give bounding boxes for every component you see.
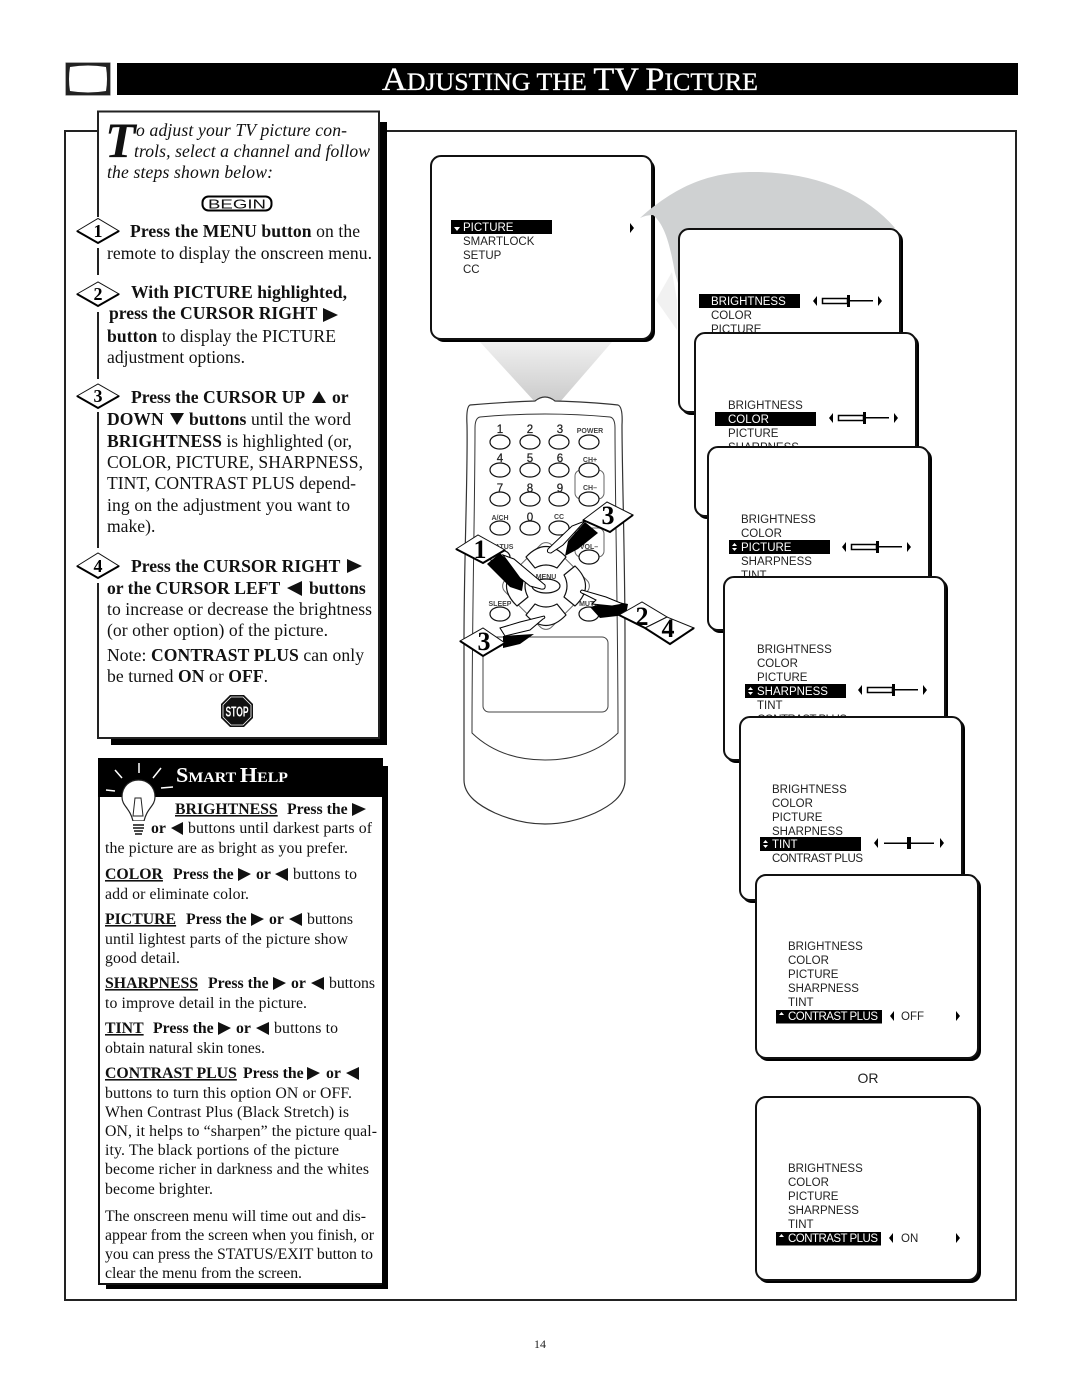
smart help tips: SHARPNESS xyxy=(105,975,198,992)
hand pointing at menu, tag 1 xyxy=(456,535,545,591)
hand pointing up, tag 3: 3 xyxy=(602,501,614,530)
step 4: 4 xyxy=(94,556,102,576)
smart help tips xyxy=(105,801,377,1282)
step 3: 3 xyxy=(94,386,102,406)
smart help tips: or xyxy=(291,975,306,992)
smart help tips: buttons to turn this option ON or OFF. xyxy=(105,1085,352,1102)
smart help tips: Press the xyxy=(208,975,269,992)
screen: sharpness: CONTRAST PLUS xyxy=(757,714,847,726)
intro text: the steps shown below: xyxy=(107,162,273,182)
screen: picture: COLOR xyxy=(741,528,782,540)
button labels: CH– xyxy=(583,485,597,492)
screen: contrast plus on: PICTURE xyxy=(788,1191,839,1203)
hand pointing right pad, tags 2 and 4: 2 xyxy=(636,602,648,631)
hand pointing down pad, tag 3: 3 xyxy=(478,627,490,656)
smart help tips: the picture are as bright as you prefer. xyxy=(105,840,348,857)
smart help tips: or xyxy=(326,1065,341,1082)
screen: tint: CONTRAST PLUS xyxy=(772,853,863,865)
smart help tips: BRIGHTNESS xyxy=(175,801,278,818)
step 1: Press the MENU button on the xyxy=(130,221,360,241)
step 3: DOWN xyxy=(107,409,164,429)
screen: contrast plus off: OFF xyxy=(901,1011,924,1023)
step 2: button to display the PICTURE xyxy=(107,326,336,346)
button labels: SLEEP xyxy=(489,601,512,608)
screen: tint: PICTURE xyxy=(772,812,823,824)
gray swoosh arrow between screens xyxy=(640,172,895,330)
step 4 xyxy=(77,553,372,686)
screen: contrast plus off: TINT xyxy=(788,997,814,1009)
smart help tips: COLOR xyxy=(105,866,164,883)
button labels: 1 xyxy=(497,424,503,436)
screen: sharpness: SHARPNESS xyxy=(757,686,828,698)
smart help tips: Press the xyxy=(243,1065,304,1082)
channel and volume brackets xyxy=(575,470,604,557)
screen: contrast plus off: BRIGHTNESS xyxy=(788,941,863,953)
screen: color: COLOR xyxy=(728,414,769,426)
button labels: 2 xyxy=(527,424,533,436)
screen: contrast plus off: SHARPNESS xyxy=(788,983,859,995)
screen: sharpness: TINT xyxy=(757,700,783,712)
cursor pad xyxy=(499,539,593,633)
cursor pad: MENU xyxy=(536,574,556,581)
button labels: VOL– xyxy=(580,544,598,551)
slider xyxy=(813,295,882,307)
smart help tips: or xyxy=(236,1020,251,1037)
button labels: 6 xyxy=(557,453,563,465)
slider xyxy=(842,541,911,553)
button labels: MUTE xyxy=(579,601,599,608)
step 4: or the CURSOR LEFT xyxy=(107,578,280,598)
remote body xyxy=(464,397,625,824)
screen: main menu: SMARTLOCK xyxy=(463,236,535,248)
slider xyxy=(858,684,927,696)
smart help tips: add or eliminate color. xyxy=(105,886,249,903)
outer frame xyxy=(65,131,1016,1300)
icon: stop sign xyxy=(221,695,253,727)
button labels: 8 xyxy=(527,483,533,495)
smart help tips: or xyxy=(269,911,284,928)
step 3: COLOR, PICTURE, SHARPNESS, xyxy=(107,452,363,472)
smart help tips: Press the xyxy=(186,911,247,928)
step 2 xyxy=(77,282,347,367)
smart help tips: buttons to xyxy=(274,1020,338,1037)
step 1 xyxy=(77,218,372,263)
screen: sharpness xyxy=(724,577,948,763)
screen: contrast plus off: PICTURE xyxy=(788,969,839,981)
step 3: Press the CURSOR UP xyxy=(131,387,305,407)
screen: sharpness: BRIGHTNESS xyxy=(757,644,832,656)
screen: color: SHARPNESS xyxy=(728,442,799,454)
smart help tips: Press the xyxy=(287,801,348,818)
screen: picture xyxy=(708,447,932,633)
step 1: 1 xyxy=(94,221,102,241)
smart help tips: TINT xyxy=(105,1020,144,1037)
screen: color: PICTURE xyxy=(728,428,779,440)
button labels: CC xyxy=(554,514,564,521)
remote control xyxy=(456,397,694,824)
screen: brightness: COLOR xyxy=(711,310,752,322)
page number: 14 xyxy=(534,1337,546,1351)
screen: contrast plus on: COLOR xyxy=(788,1177,829,1189)
smart help tips: ON, it helps to “sharpen” the picture qual- xyxy=(105,1123,377,1140)
screen: tint xyxy=(740,717,965,903)
smart help tips: CONTRAST PLUS xyxy=(105,1065,237,1082)
screen: main menu xyxy=(431,156,655,342)
hand pointing up, tag 3 xyxy=(547,501,633,556)
step 3 xyxy=(77,384,363,536)
button labels: 5 xyxy=(527,453,533,465)
screen: contrast plus on: BRIGHTNESS xyxy=(788,1163,863,1175)
smart help tips: become brighter. xyxy=(105,1181,213,1198)
smart help tips: Press the xyxy=(173,866,234,883)
light beam from remote xyxy=(480,342,612,402)
step 3: BRIGHTNESS is highlighted (or, xyxy=(107,431,352,451)
step 4: (or other option) of the picture. xyxy=(107,620,328,640)
step 3: or xyxy=(332,387,349,407)
smart help tips: or xyxy=(151,820,166,837)
smart help tips: good detail. xyxy=(105,950,180,967)
screen: main menu: PICTURE xyxy=(463,222,514,234)
smart help tips: Press the xyxy=(153,1020,214,1037)
screen: tint: TINT xyxy=(772,839,798,851)
slider xyxy=(874,837,944,849)
screen: contrast plus off: COLOR xyxy=(788,955,829,967)
step 4: be turned ON or OFF. xyxy=(107,666,268,686)
step 2: press the CURSOR RIGHT xyxy=(109,303,318,323)
button labels: POWER xyxy=(577,428,603,435)
screen: contrast plus off xyxy=(756,875,981,1061)
smart help tips: appear from the screen when you finish, or xyxy=(105,1227,375,1244)
smart help tips: buttons xyxy=(307,911,353,928)
smart help tips: you can press the STATUS/EXIT button to xyxy=(105,1246,373,1263)
button labels: STATUS xyxy=(487,544,514,551)
intro text xyxy=(105,112,370,182)
smart help tips: to improve detail in the picture. xyxy=(105,995,307,1012)
step 3: make). xyxy=(107,516,155,536)
smart help tips: until lightest parts of the picture show xyxy=(105,931,349,948)
panel: intro and steps xyxy=(77,111,387,745)
hand pointing right pad, tags 2 and 4 xyxy=(580,590,694,644)
step 2: adjustment options. xyxy=(107,347,245,367)
smart help tips: or xyxy=(256,866,271,883)
screen: picture: BRIGHTNESS xyxy=(741,514,816,526)
smart help heading: SMART HELP xyxy=(176,763,288,787)
screen: contrast plus on: TINT xyxy=(788,1219,814,1231)
step 1: remote to display the onscreen menu. xyxy=(107,243,372,263)
button labels: 7 xyxy=(497,483,503,495)
slider xyxy=(829,412,898,424)
screen: contrast plus on xyxy=(756,1097,981,1283)
smart help tips: clear the menu from the screen. xyxy=(105,1265,302,1282)
smart help tips: obtain natural skin tones. xyxy=(105,1040,265,1057)
step 3: TINT, CONTRAST PLUS depend- xyxy=(107,473,356,493)
hand pointing down pad, tag 3 xyxy=(460,616,545,656)
screen: main menu: CC xyxy=(463,264,480,276)
screen: tint: SHARPNESS xyxy=(772,826,843,838)
panel: smart help xyxy=(98,758,388,1289)
icon: TV set xyxy=(66,63,110,95)
smart help tips: PICTURE xyxy=(105,911,176,928)
screen: contrast plus on: SHARPNESS xyxy=(788,1205,859,1217)
button labels: 3 xyxy=(557,424,563,436)
screen: picture: SHARPNESS xyxy=(741,556,812,568)
hand pointing at menu, tag 1: 1 xyxy=(474,535,486,564)
icon: light bulb xyxy=(106,763,173,836)
screen: picture: TINT xyxy=(741,570,767,582)
screen: contrast plus off: CONTRAST PLUS xyxy=(788,1011,878,1023)
buttons xyxy=(490,435,599,621)
screen: color: BRIGHTNESS xyxy=(728,400,803,412)
smart help tips: buttons until darkest parts of xyxy=(188,820,373,837)
step 4: Press the CURSOR RIGHT xyxy=(131,556,341,576)
step 4: Note: CONTRAST PLUS can only xyxy=(107,645,364,665)
smart help tips: When Contrast Plus (Black Stretch) is xyxy=(105,1104,349,1121)
intro text: T xyxy=(105,112,138,168)
step 3: buttons until the word xyxy=(189,409,351,429)
title bar: ADJUSTING THE TV PICTURE xyxy=(382,62,758,98)
smart help tips: buttons xyxy=(329,975,375,992)
screen: brightness xyxy=(679,229,903,415)
begin label: BEGIN xyxy=(208,198,266,212)
screen cutout xyxy=(483,637,608,712)
screen: main menu: SETUP xyxy=(463,250,502,262)
title bar xyxy=(117,62,1018,98)
smart help tips: The onscreen menu will time out and dis- xyxy=(105,1208,366,1225)
screen: tint: COLOR xyxy=(772,798,813,810)
button labels: A/CH xyxy=(491,515,509,522)
button labels: 9 xyxy=(557,483,563,495)
icon: stop sign: STOP xyxy=(226,704,249,720)
screen: brightness: PICTURE xyxy=(711,324,762,336)
screen: contrast plus on: ON xyxy=(901,1233,918,1245)
step 4: to increase or decrease the brightness xyxy=(107,599,372,619)
step 2: With PICTURE highlighted, xyxy=(131,282,347,302)
step 4: buttons xyxy=(309,578,366,598)
screen: sharpness: PICTURE xyxy=(757,672,808,684)
screen: contrast plus on: CONTRAST PLUS xyxy=(788,1233,878,1245)
smart help tips: buttons to xyxy=(293,866,357,883)
screen: picture: PICTURE xyxy=(741,542,792,554)
step 2: 2 xyxy=(94,284,102,304)
step 3: ing on the adjustment you want to xyxy=(107,495,350,515)
screen: color xyxy=(695,333,919,519)
label: or: OR xyxy=(858,1070,878,1086)
smart help tips: ity. The black portions of the picture xyxy=(105,1142,339,1159)
smart help tips: become richer in darkness and the whites xyxy=(105,1161,369,1178)
screen: sharpness: COLOR xyxy=(757,658,798,670)
begin label xyxy=(202,196,272,212)
button labels: 0 xyxy=(527,512,533,524)
hand pointing right pad, tags 2 and 4: 4 xyxy=(662,614,674,643)
screen: tint: BRIGHTNESS xyxy=(772,784,847,796)
button labels: CH+ xyxy=(583,457,597,464)
button labels: 4 xyxy=(497,453,504,465)
button labels xyxy=(487,424,603,608)
intro text: o adjust your TV picture con- xyxy=(136,120,347,140)
screen: brightness: BRIGHTNESS xyxy=(711,296,786,308)
intro text: trols, select a channel and follow xyxy=(134,141,370,161)
